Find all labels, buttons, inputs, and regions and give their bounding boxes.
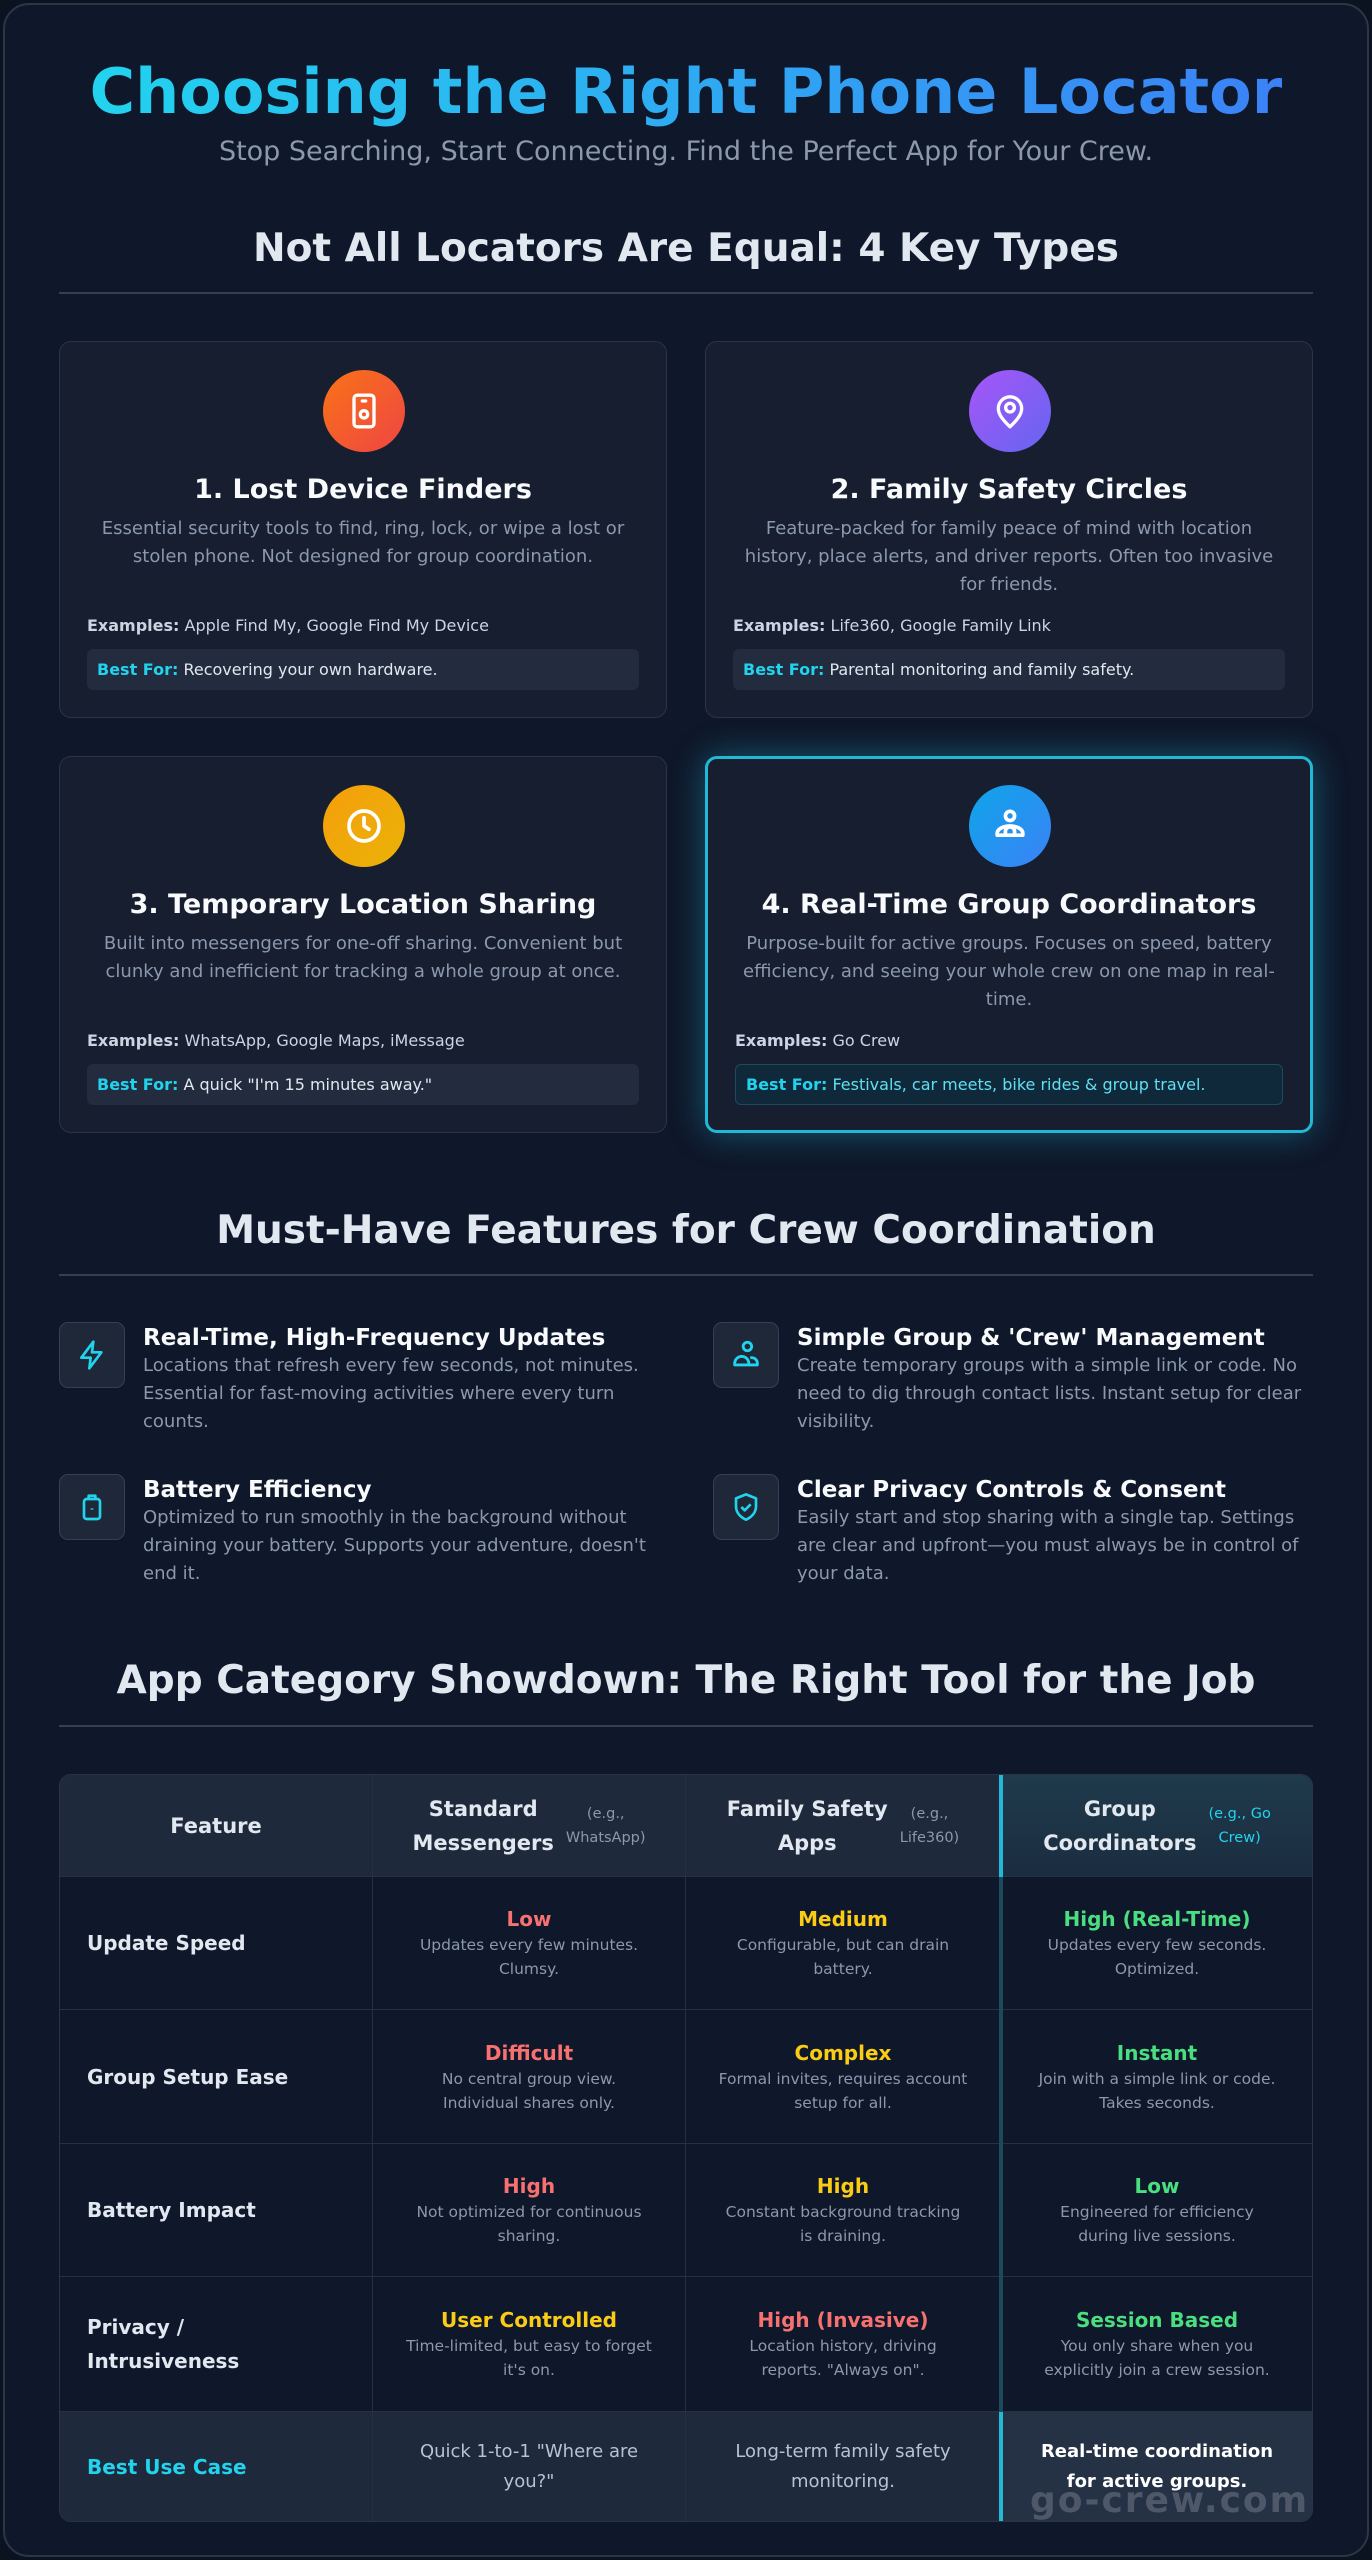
best for <box>87 1064 639 1105</box>
feature: battery efficiency: Battery Efficiency <box>143 1477 371 1503</box>
feature: group management: Create temporary groups with a simple link or code. No need to dig through contact lists. Instant setup for clear visibility. <box>797 1355 1301 1432</box>
row: battery: Battery Impact <box>87 2198 256 2222</box>
feature icon: bolt <box>59 1322 125 1388</box>
comparison table: Coordinators <box>1043 1830 1196 1854</box>
panel: lost device finders <box>59 341 667 718</box>
card description: Feature-packed for family peace of mind with location history, place alerts, and driver reports. Often too invasive for friends. <box>745 518 1273 595</box>
panel: real-time group coordinators (highlighted) <box>705 756 1313 1133</box>
comparison table: Quick 1-to-1 "Where are you?" <box>420 2441 638 2492</box>
row: group setup <box>60 2010 373 2144</box>
feature: privacy controls: Easily start and stop sharing with a single tap. Settings are clear and upfront—you must always be in control of your data. <box>797 1507 1298 1584</box>
header row <box>60 1775 373 1877</box>
card title: 4. Real-Time Group Coordinators <box>762 889 1256 920</box>
examples: Examples: Apple Find My, Google Find My Device <box>87 616 489 635</box>
feature: privacy controls: Clear Privacy Controls & Consent <box>797 1477 1226 1503</box>
comparison table: Location history, driving reports. "Always on". <box>749 2337 937 2379</box>
feature icon: shield <box>713 1474 779 1540</box>
comparison table: Low <box>507 1907 551 1931</box>
card description: Built into messengers for one-off sharing. Convenient but clunky and inefficient for tracking a whole group at once. <box>104 933 622 982</box>
row: update speed <box>60 1877 373 2010</box>
comparison table: (e.g., <box>911 1806 948 1822</box>
best for: Best For: Recovering your own hardware. <box>97 660 438 679</box>
header row: Feature <box>170 1814 262 1838</box>
row: battery <box>60 2144 373 2277</box>
icon: pin <box>969 370 1051 452</box>
comparison table: Instant <box>1117 2040 1197 2064</box>
comparison table: Time-limited, but easy to forget it's on. <box>406 2337 652 2379</box>
card title: 3. Temporary Location Sharing <box>130 889 596 920</box>
comparison table: Crew) <box>1219 1830 1261 1846</box>
feature icon: group <box>713 1322 779 1388</box>
comparison table: No central group view. Individual shares only. <box>442 2070 616 2112</box>
comparison table: Long-term family safety monitoring. <box>735 2441 951 2492</box>
best for <box>87 649 639 690</box>
comparison table: Updates every few minutes. Clumsy. <box>420 1936 638 1978</box>
title: Choosing the Right Phone Locator <box>90 55 1282 128</box>
comparison table: WhatsApp) <box>566 1830 646 1846</box>
subtitle: Stop Searching, Start Connecting. Find the Perfect App for Your Crew. <box>219 136 1153 167</box>
comparison table: High <box>503 2174 555 2198</box>
best for <box>733 649 1285 690</box>
comparison table: Medium <box>798 1907 888 1931</box>
feature icon: battery <box>59 1474 125 1540</box>
comparison table: Formal invites, requires account setup for all. <box>719 2070 967 2112</box>
comparison table: (e.g., Go <box>1208 1806 1271 1822</box>
examples: Examples: Go Crew <box>735 1031 900 1050</box>
feature: real-time updates: Real-Time, High-Frequency Updates <box>143 1325 605 1351</box>
row: group setup: Group Setup Ease <box>87 2064 288 2088</box>
comparison table: Engineered for efficiency during live sessions. <box>1060 2203 1254 2245</box>
card description: Purpose-built for active groups. Focuses on speed, battery efficiency, and seeing your whole crew on one map in real-time. <box>743 933 1275 1010</box>
highlight column bar <box>999 1775 1003 1877</box>
comparison table: Apps <box>778 1830 837 1854</box>
comparison table: Standard <box>429 1796 538 1820</box>
watermark: go-crew.com <box>1030 2480 1309 2521</box>
row: privacy: Privacy / <box>87 2315 184 2339</box>
best for: Best For: Festivals, car meets, bike rides & group travel. <box>746 1075 1206 1094</box>
comparison table: Session Based <box>1076 2308 1238 2332</box>
icon: clock <box>323 785 405 867</box>
comparison table: Family Safety <box>727 1796 888 1820</box>
examples: Examples: WhatsApp, Google Maps, iMessage <box>87 1031 465 1050</box>
comparison table: Life360) <box>900 1830 959 1846</box>
row: best use case: Best Use Case <box>87 2455 247 2479</box>
examples: Examples: Life360, Google Family Link <box>733 616 1051 635</box>
comparison table: Updates every few seconds. Optimized. <box>1048 1936 1266 1978</box>
comparison table: Low <box>1135 2174 1179 2198</box>
row: update speed: Update Speed <box>87 1931 246 1955</box>
row: privacy <box>60 2277 373 2412</box>
comparison table: Group <box>1084 1796 1156 1820</box>
feature: group management: Simple Group & 'Crew' Management <box>797 1325 1265 1351</box>
comparison table: (e.g., <box>587 1806 625 1822</box>
card title: 1. Lost Device Finders <box>194 474 532 505</box>
heading: 4 key types: Not All Locators Are Equal: 4 Key Types <box>253 226 1119 271</box>
comparison table: High (Invasive) <box>758 2308 928 2332</box>
comparison table: Messengers <box>412 1830 554 1854</box>
comparison table: You only share when you explicitly join a crew session. <box>1044 2337 1270 2379</box>
comparison table: Join with a simple link or code. Takes seconds. <box>1039 2070 1275 2112</box>
best for: Best For: A quick "I'm 15 minutes away." <box>97 1075 432 1094</box>
comparison table: Complex <box>795 2040 891 2064</box>
comparison table: Configurable, but can drain battery. <box>737 1936 949 1978</box>
comparison table: Real-time coordination for active groups. <box>1041 2441 1273 2492</box>
comparison table: Constant background tracking is draining. <box>726 2203 960 2245</box>
feature: battery efficiency: Optimized to run smoothly in the background without draining your battery. Supports your adventure, doesn't end it. <box>143 1507 646 1584</box>
best for <box>735 1064 1283 1105</box>
card title: 2. Family Safety Circles <box>831 474 1187 505</box>
comparison table: Difficult <box>485 2040 573 2064</box>
comparison table: Not optimized for continuous sharing. <box>416 2203 642 2245</box>
icon: group <box>969 785 1051 867</box>
card description: Essential security tools to find, ring, lock, or wipe a lost or stolen phone. Not designed for group coordination. <box>102 518 624 567</box>
comparison table: High <box>817 2174 869 2198</box>
best for: Best For: Parental monitoring and family safety. <box>743 660 1134 679</box>
comparison table: High (Real-Time) <box>1064 1907 1250 1931</box>
panel: temporary location sharing <box>59 756 667 1133</box>
panel: family safety circles <box>705 341 1313 718</box>
heading: showdown: App Category Showdown: The Right Tool for the Job <box>117 1658 1255 1703</box>
comparison table: User Controlled <box>441 2308 617 2332</box>
icon: phone <box>323 370 405 452</box>
heading: must-have features: Must-Have Features for Crew Coordination <box>216 1208 1156 1253</box>
feature: real-time updates: Locations that refresh every few seconds, not minutes. Essential for fast-moving activities where every turn counts. <box>143 1355 639 1432</box>
comparison table <box>59 1774 1313 2522</box>
row: privacy: Intrusiveness <box>87 2349 239 2373</box>
row: best use case <box>60 2412 373 2523</box>
